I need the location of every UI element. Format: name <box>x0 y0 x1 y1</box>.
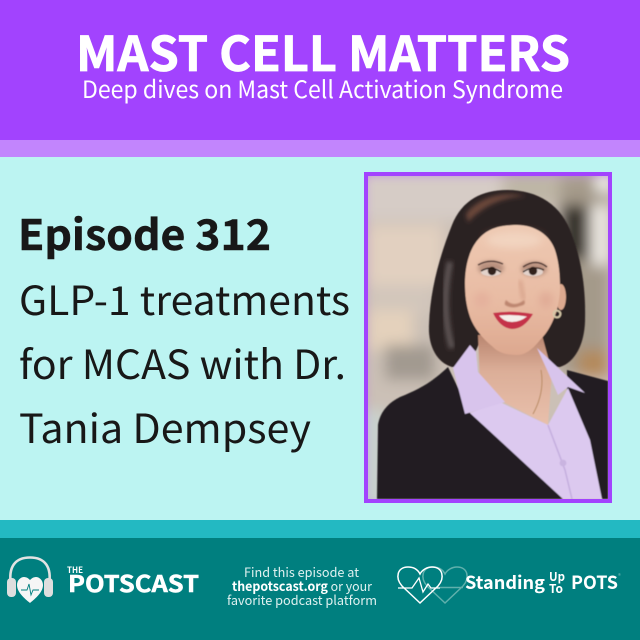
registered mark: ® <box>618 571 621 580</box>
title: MAST CELL MATTERS <box>76 15 570 85</box>
call to action line 3: favorite podcast platform <box>227 590 377 609</box>
episode text block <box>18 202 350 455</box>
call to action line 2: thepotscast.org or your <box>232 576 373 595</box>
cheek shading <box>474 232 553 308</box>
episode number: Episode 312 <box>18 202 271 263</box>
shirt <box>470 388 602 499</box>
episode title line 1: GLP-1 treatments <box>19 269 350 327</box>
logo: The Potscast <box>67 564 199 599</box>
logo word: standing: Standing <box>465 569 545 595</box>
hair highlight <box>466 194 525 222</box>
shirt collar <box>453 345 585 414</box>
header band <box>0 0 640 157</box>
call to action line 1: Find this episode at <box>244 562 359 581</box>
eyes <box>478 261 547 276</box>
main background <box>0 157 640 520</box>
icon: overlapping hearts <box>398 567 467 603</box>
episode title line 2: for MCAS with Dr. <box>19 333 346 391</box>
jacket <box>377 367 608 499</box>
ear <box>556 284 566 310</box>
episode title line 3: Tania Dempsey <box>19 397 311 455</box>
logo word: potscast: POTSCAST <box>68 565 199 599</box>
teal divider band <box>0 520 640 538</box>
logo word: the: THE <box>67 564 83 576</box>
subtitle: Deep dives on Mast Cell Activation Syndrome <box>82 70 563 105</box>
logo: Standing Up To POTS <box>465 568 621 597</box>
neck <box>478 335 552 425</box>
footer band <box>0 538 640 640</box>
necklace <box>533 370 542 414</box>
logo word: to: To <box>549 580 563 597</box>
earring <box>554 311 560 317</box>
face <box>465 225 560 355</box>
logo word: up: Up <box>549 568 565 585</box>
person <box>377 190 608 499</box>
lips <box>493 312 533 329</box>
nose <box>505 300 525 308</box>
footer call to action <box>227 562 377 609</box>
blurred office background <box>368 176 608 499</box>
logo word: pots: POTS <box>571 569 618 595</box>
icon: headphones with heart <box>7 558 53 603</box>
hair <box>429 190 585 367</box>
guest portrait <box>360 170 620 510</box>
